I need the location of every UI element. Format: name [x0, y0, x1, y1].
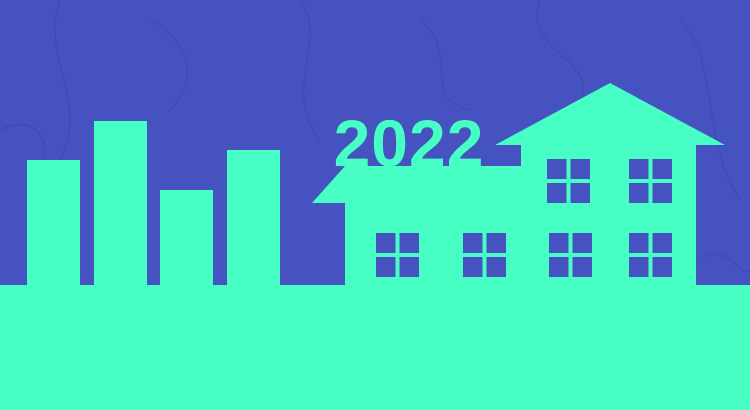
house — [312, 83, 725, 290]
bar chart — [27, 121, 280, 291]
year 2022: 2022 — [334, 106, 484, 180]
ground — [0, 285, 750, 410]
windows — [0, 0, 672, 277]
